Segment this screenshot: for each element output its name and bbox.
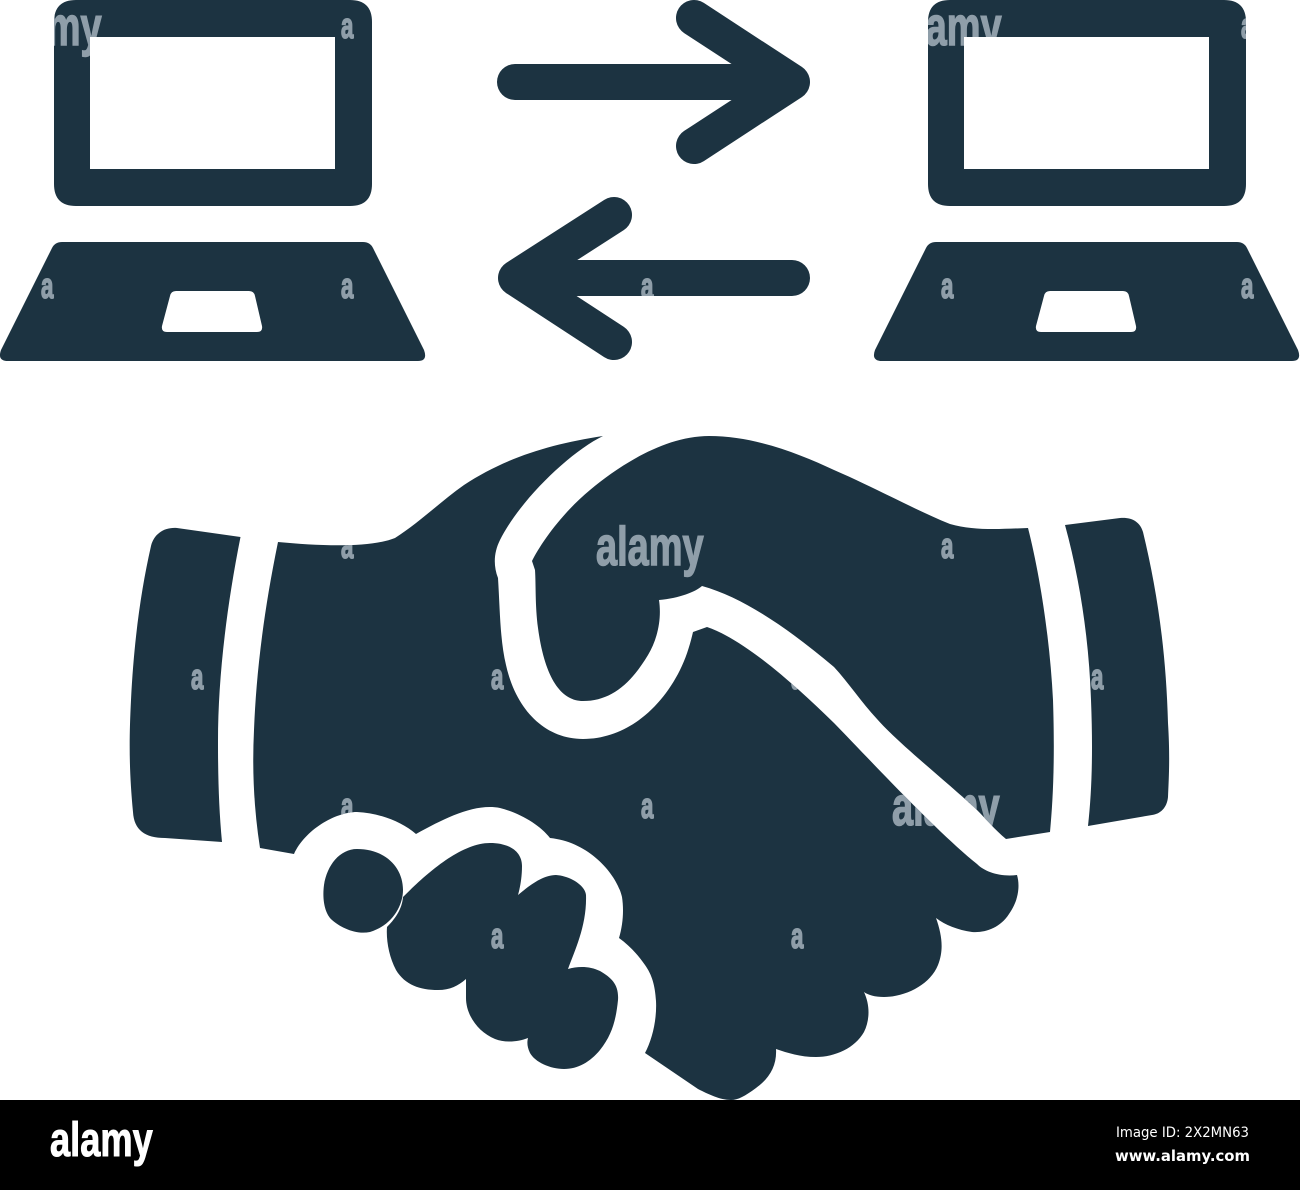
watermark: alamy tiles: a — [941, 527, 954, 566]
watermark: alamy tiles: a — [1241, 267, 1254, 306]
watermark: alamy tiles: a — [491, 658, 504, 697]
footer image id: Image ID: 2X2MN63 — [1116, 1125, 1249, 1141]
watermark: alamy tiles: a — [341, 7, 354, 46]
footer bar — [0, 1100, 1300, 1190]
watermark: alamy tiles — [0, 0, 1254, 956]
watermark: alamy tiles: a — [491, 917, 504, 956]
watermark: alamy tiles: a — [1091, 658, 1104, 697]
left cuff — [130, 528, 240, 842]
watermark: alamy tiles: alamy — [892, 776, 1000, 838]
arrow: pointing right — [515, 18, 792, 146]
fingers — [323, 849, 403, 933]
watermark: alamy tiles: a — [641, 267, 654, 306]
watermark: alamy tiles: a — [341, 527, 354, 566]
watermark: alamy tiles: a — [791, 917, 804, 956]
left hand — [253, 436, 1018, 1100]
icon: left laptop — [0, 0, 425, 361]
watermark: alamy tiles: a — [941, 267, 954, 306]
watermark: alamy tiles: a — [341, 787, 354, 826]
footer logo: alamy — [50, 1114, 153, 1167]
watermark: alamy tiles: a — [1241, 7, 1254, 46]
right hand — [532, 436, 1054, 839]
right cuff — [1065, 518, 1169, 826]
watermark: alamy tiles: a — [641, 787, 654, 826]
arrow: pointing left — [516, 215, 792, 342]
watermark: alamy tiles: a — [341, 267, 354, 306]
watermark: alamy tiles: a — [41, 267, 54, 306]
icon: handshake — [130, 436, 1169, 1100]
watermark: alamy tiles: a — [191, 658, 204, 697]
footer url: www.alamy.com — [1115, 1147, 1250, 1165]
watermark: alamy tiles: alamy — [596, 516, 704, 578]
watermark: alamy tiles: a — [791, 658, 804, 697]
icon: right laptop — [874, 0, 1299, 361]
